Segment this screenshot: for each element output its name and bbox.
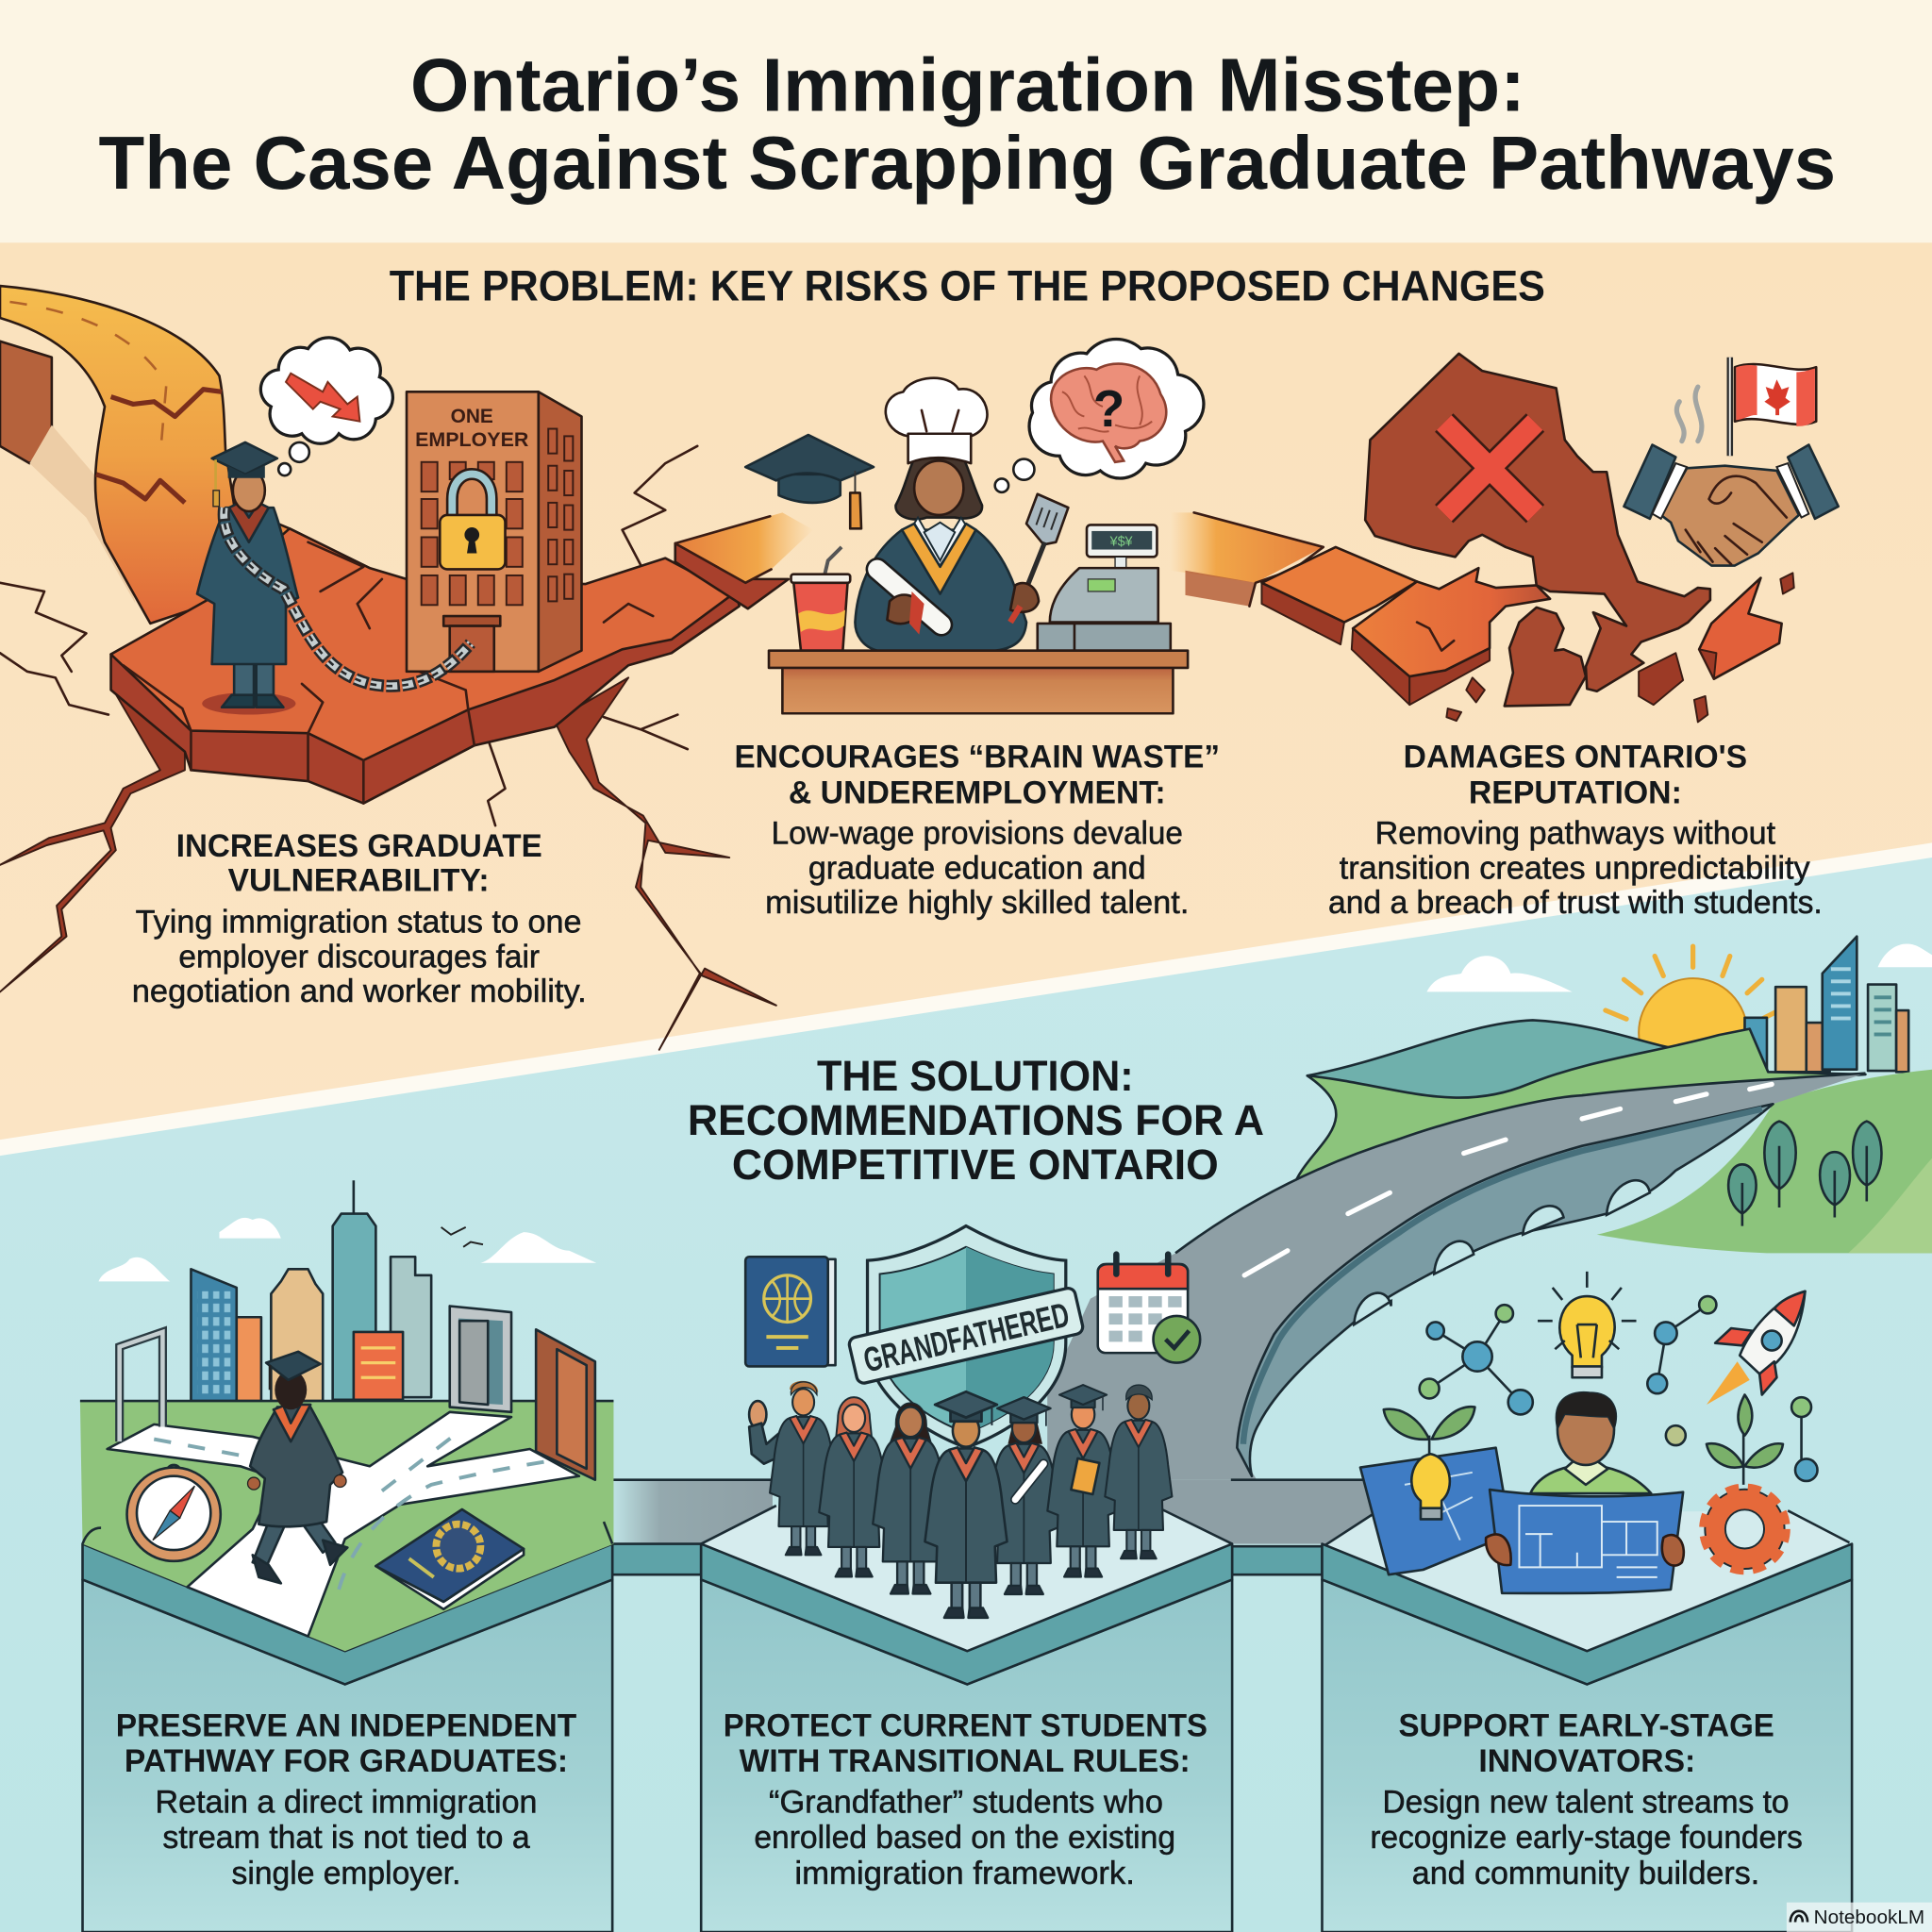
Michigan: [1505, 608, 1586, 706]
large blueprint: [1486, 1490, 1684, 1593]
panel: solution background: [0, 850, 1932, 1932]
text: “Grandfather” students who: [769, 1784, 1163, 1820]
grandfathered stamp: [848, 1287, 1084, 1385]
diploma: [877, 569, 941, 625]
mountain: [1307, 1020, 1668, 1109]
text: WITH TRANSITIONAL RULES:: [740, 1743, 1191, 1779]
rocket: [1707, 1291, 1805, 1405]
passport on grass: [375, 1509, 524, 1609]
icon: floating graduation cap: [745, 435, 874, 528]
diagonal divider: [0, 842, 1932, 1156]
illustration: crumbling road into Ontario map: [1171, 354, 1794, 722]
text: [116, 1707, 577, 1891]
text block: damages reputation: DAMAGES ONTARIO'S: [1404, 740, 1747, 775]
text block: brain waste: Low-wage provisions devalue: [772, 816, 1183, 852]
title: The Case Against Scrapping Graduate Pathways: [98, 121, 1836, 205]
heading: the solution: RECOMMENDATIONS FOR A: [688, 1096, 1264, 1144]
connector: road between platforms 2 and 3: [1152, 1480, 1380, 1574]
grandfathered stamp: GRANDFATHERED: [860, 1295, 1073, 1380]
illustration: sunrise, city, hills: [1292, 937, 1932, 1253]
text: stream that is not tied to a: [162, 1820, 530, 1856]
text block: increases graduate vulnerability: Tying immigration status to one: [136, 905, 581, 941]
heading: the problem: THE PROBLEM: KEY RISKS OF THE PROPOSED CHANGES: [390, 262, 1545, 310]
plant bulb: [1384, 1407, 1474, 1519]
red X: [1444, 423, 1535, 514]
chain: [224, 508, 471, 686]
collapsing road: [0, 286, 370, 624]
text block: increases graduate vulnerability: [132, 828, 587, 1009]
text block: damages reputation: REPUTATION:: [1469, 775, 1682, 811]
text: and community builders.: [1412, 1856, 1759, 1891]
illustration: city behind: [98, 1180, 596, 1401]
text: single employer.: [232, 1856, 460, 1891]
illustration: road bridge: [1047, 1074, 1865, 1480]
illustration: broken road and cracked platform: [0, 286, 813, 804]
header band: [0, 0, 1932, 244]
icon: Canadian flag: [1676, 358, 1816, 456]
icon: one employer building: [407, 391, 581, 672]
icon: one employer building: ONE: [451, 406, 493, 427]
hair: [895, 458, 982, 520]
NotebookLM badge: [1787, 1903, 1932, 1932]
text: PROTECT CURRENT STUDENTS: [724, 1707, 1208, 1743]
desk: [782, 667, 1173, 713]
panel: recommendation 3: [1322, 1272, 1852, 1932]
chef hat: [886, 378, 987, 436]
connector: road between platforms 1 and 2: [612, 1480, 776, 1574]
text block: brain waste: & UNDEREMPLOYMENT:: [789, 775, 1166, 811]
text: enrolled based on the existing: [754, 1820, 1175, 1856]
text block: damages reputation: Removing pathways without: [1375, 816, 1776, 852]
icon: thought bubble falling arrow: [260, 338, 392, 475]
sun: [1639, 978, 1747, 1087]
text: INNOVATORS:: [1478, 1743, 1695, 1779]
platform top: [111, 528, 733, 760]
shield: [868, 1226, 1066, 1448]
debris: [1699, 578, 1782, 679]
bridge remnant: [0, 341, 52, 463]
text block: brain waste: ENCOURAGES “BRAIN WASTE”: [734, 740, 1220, 775]
text: Design new talent streams to: [1382, 1784, 1789, 1820]
text block: increases graduate vulnerability: VULNERABILITY:: [228, 862, 490, 898]
panel: recommendation 1: [80, 1180, 613, 1932]
text: [724, 1707, 1208, 1891]
innovator person: [1530, 1391, 1651, 1493]
clouds: [1426, 956, 1573, 991]
text: [1370, 1707, 1803, 1891]
light bulb: [1538, 1272, 1637, 1377]
graduates group: [749, 1381, 1172, 1618]
cash register: [1087, 525, 1157, 557]
heading: the solution: COMPETITIVE ONTARIO: [732, 1141, 1219, 1189]
panel: recommendation 2: [701, 1226, 1232, 1932]
text block: brain waste: misutilize highly skilled talent.: [765, 885, 1189, 921]
text: PATHWAY FOR GRADUATES:: [125, 1743, 568, 1779]
green hills: [1292, 1029, 1865, 1189]
platform side: [111, 579, 740, 804]
grass: [80, 1401, 613, 1651]
text: immigration framework.: [794, 1856, 1135, 1891]
scroll blueprint: [1360, 1448, 1510, 1574]
illustration: graduate at fast food counter: [769, 378, 1188, 713]
compass: [127, 1465, 221, 1561]
icon: one employer building: EMPLOYER: [415, 429, 528, 451]
text: Retain a direct immigration: [156, 1784, 537, 1820]
spatula: [1026, 494, 1068, 544]
text block: damages reputation: [1328, 740, 1823, 921]
soda cup: [823, 547, 841, 581]
title: [98, 43, 1836, 205]
text: SUPPORT EARLY-STAGE: [1398, 1707, 1774, 1743]
network left: [1420, 1305, 1533, 1414]
text block: damages reputation: and a breach of trust with students.: [1328, 885, 1823, 921]
panel: problem background: [0, 242, 1932, 1158]
icon: thought bubble brain: [995, 339, 1204, 492]
icon: handshake: [1624, 445, 1839, 566]
gown: [855, 530, 1026, 651]
gear and sprout: [1706, 1395, 1784, 1569]
heading: the solution: [688, 1052, 1264, 1189]
Ontario main land: [1365, 354, 1710, 691]
ground cracks: [0, 446, 776, 1050]
text block: brain waste: graduate education and: [808, 850, 1146, 886]
padlock: [440, 475, 506, 569]
text block: increases graduate vulnerability: employer discourages fair: [178, 939, 540, 974]
calendar: [1098, 1255, 1200, 1363]
illustration: graduate at fast food counter: ¥$¥: [1109, 535, 1133, 550]
icon: thought bubble brain: ?: [1093, 379, 1124, 438]
passport: [745, 1257, 836, 1366]
road piece fading: [675, 543, 789, 608]
graduate walking: [248, 1352, 347, 1583]
text: PRESERVE AN INDEPENDENT: [116, 1707, 577, 1743]
heading: the solution: THE SOLUTION:: [817, 1052, 1134, 1100]
text block: brain waste: [734, 740, 1220, 921]
text block: damages reputation: transition creates unpredictability: [1340, 850, 1810, 886]
title: Ontario’s Immigration Misstep:: [410, 43, 1525, 127]
network right: [1647, 1296, 1818, 1481]
buildings: [1719, 1045, 1744, 1072]
doors: [120, 1306, 595, 1480]
text: recognize early-stage founders: [1370, 1820, 1803, 1856]
NotebookLM badge: NotebookLM: [1814, 1907, 1924, 1928]
path fork: [108, 1412, 579, 1637]
illustration: chained graduate: [197, 442, 471, 715]
text block: increases graduate vulnerability: INCREASES GRADUATE: [176, 828, 542, 864]
trees: [1728, 1122, 1881, 1226]
graduate waving: [749, 1381, 837, 1555]
text block: increases graduate vulnerability: negotiation and worker mobility.: [132, 974, 587, 1009]
